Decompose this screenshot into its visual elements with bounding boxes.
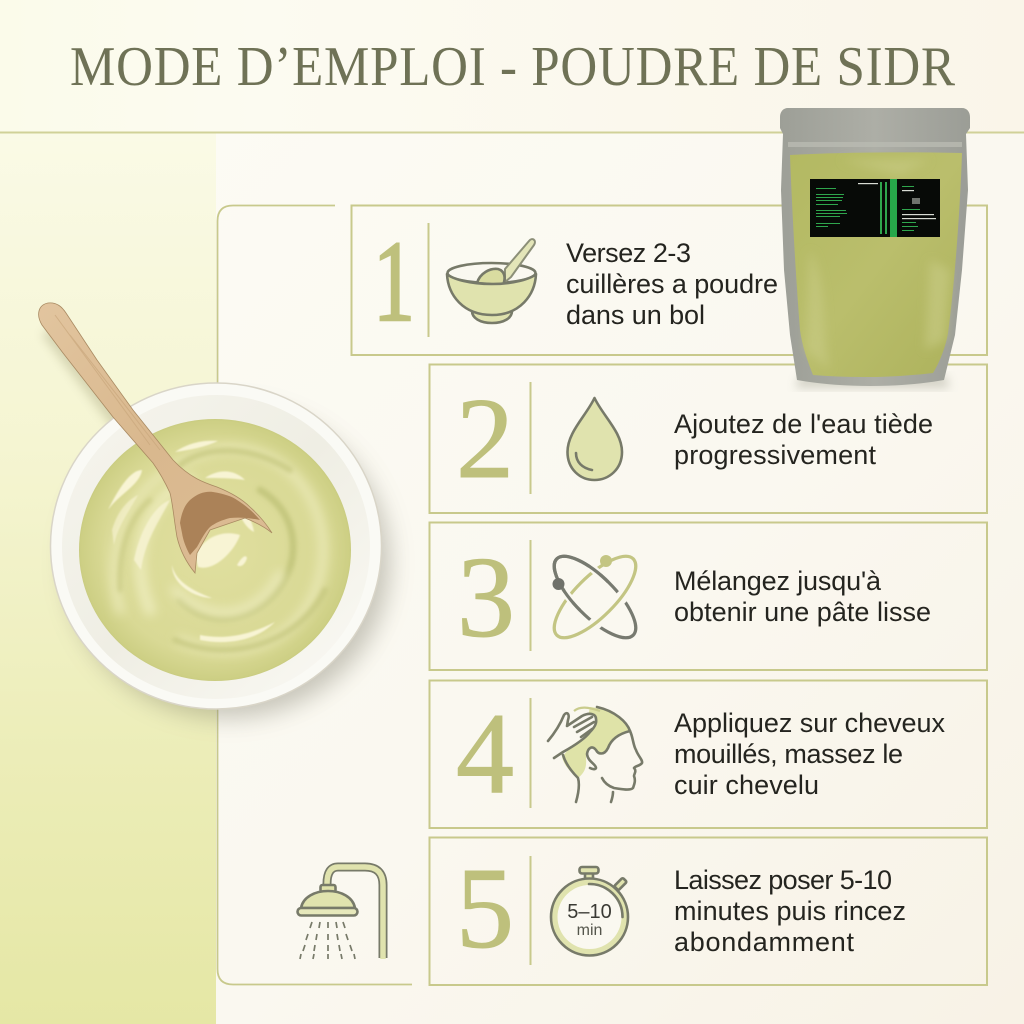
label micro lines [816, 182, 920, 234]
frame [430, 838, 987, 985]
divider [530, 698, 532, 808]
step 1 text: dans un bol [566, 300, 705, 330]
step 5 text: abondamment [674, 927, 854, 957]
paste swirls [114, 449, 325, 650]
timer unit: min [577, 922, 602, 939]
number 3: 3 [457, 534, 515, 662]
number 2: 2 [456, 375, 514, 503]
wooden spoon [39, 303, 272, 573]
divider [530, 856, 532, 965]
icon: head massage [548, 707, 642, 802]
header rule [0, 132, 1024, 134]
product pouch [780, 108, 970, 388]
icon: bowl and spoon [447, 239, 536, 323]
title: MODE D’EMPLOI - POUDRE DE SIDR [70, 35, 955, 98]
panel: step 5 [430, 838, 987, 985]
frame [352, 206, 987, 355]
step 4 text: Appliquez sur cheveux [674, 708, 946, 738]
frame [430, 522, 987, 670]
number 1: 1 [373, 217, 415, 345]
paste [79, 419, 351, 681]
bowl shadow [66, 406, 390, 718]
icon: mixing orbit [552, 554, 638, 640]
frame [430, 680, 987, 828]
panel: step 2 [430, 364, 987, 513]
number 4: 4 [456, 690, 514, 818]
step 4 text: cuir chevelu [674, 770, 819, 800]
step 4 text [674, 708, 946, 800]
frame [430, 364, 987, 513]
step 5 text: minutes puis rincez [674, 896, 906, 926]
panel: step 3 [430, 522, 987, 670]
step 3 text [674, 566, 931, 627]
panel: step 1 [352, 206, 987, 355]
icon: water drop [568, 398, 622, 480]
step 1 text: cuillères a poudre [566, 269, 778, 299]
timer label: 5–10 [567, 901, 612, 923]
panel: step 4 [430, 680, 987, 828]
step 3 text: Mélangez jusqu'à [674, 566, 882, 596]
step 5 text: Laissez poser 5-10 [674, 865, 892, 895]
seal strip [788, 142, 962, 147]
number 5: 5 [456, 845, 514, 973]
pouch shadow [795, 375, 950, 388]
powder window [790, 152, 962, 377]
icon: stopwatch [551, 867, 628, 956]
spoon grain [55, 315, 160, 450]
label white lines [858, 183, 936, 219]
outer bracket [218, 206, 412, 984]
powder texture [806, 160, 950, 370]
icon: shower [298, 867, 383, 959]
spoon shadow [48, 330, 140, 450]
step 1 text [566, 238, 778, 330]
paste highlights [108, 441, 275, 642]
divider [530, 540, 532, 651]
step 2 text: Ajoutez de l'eau tiède [674, 409, 933, 439]
divider [428, 223, 430, 337]
divider [530, 382, 532, 494]
step 5 text [674, 865, 906, 957]
left colour band [0, 132, 216, 1024]
step 2 text: progressivement [674, 440, 876, 470]
label stripe [890, 179, 897, 237]
ceramic bowl [50, 383, 382, 709]
step 1 text: Versez 2-3 [566, 238, 691, 268]
illustration: bowl with paste and wooden spoon [39, 303, 390, 718]
spoon bowl interior [180, 492, 260, 555]
header band [0, 0, 1024, 132]
pouch body [780, 108, 970, 386]
step 4 text: mouillés, massez le [674, 739, 903, 769]
label [810, 179, 940, 237]
step 3 text: obtenir une pâte lisse [674, 597, 931, 627]
step 2 text [674, 409, 933, 470]
